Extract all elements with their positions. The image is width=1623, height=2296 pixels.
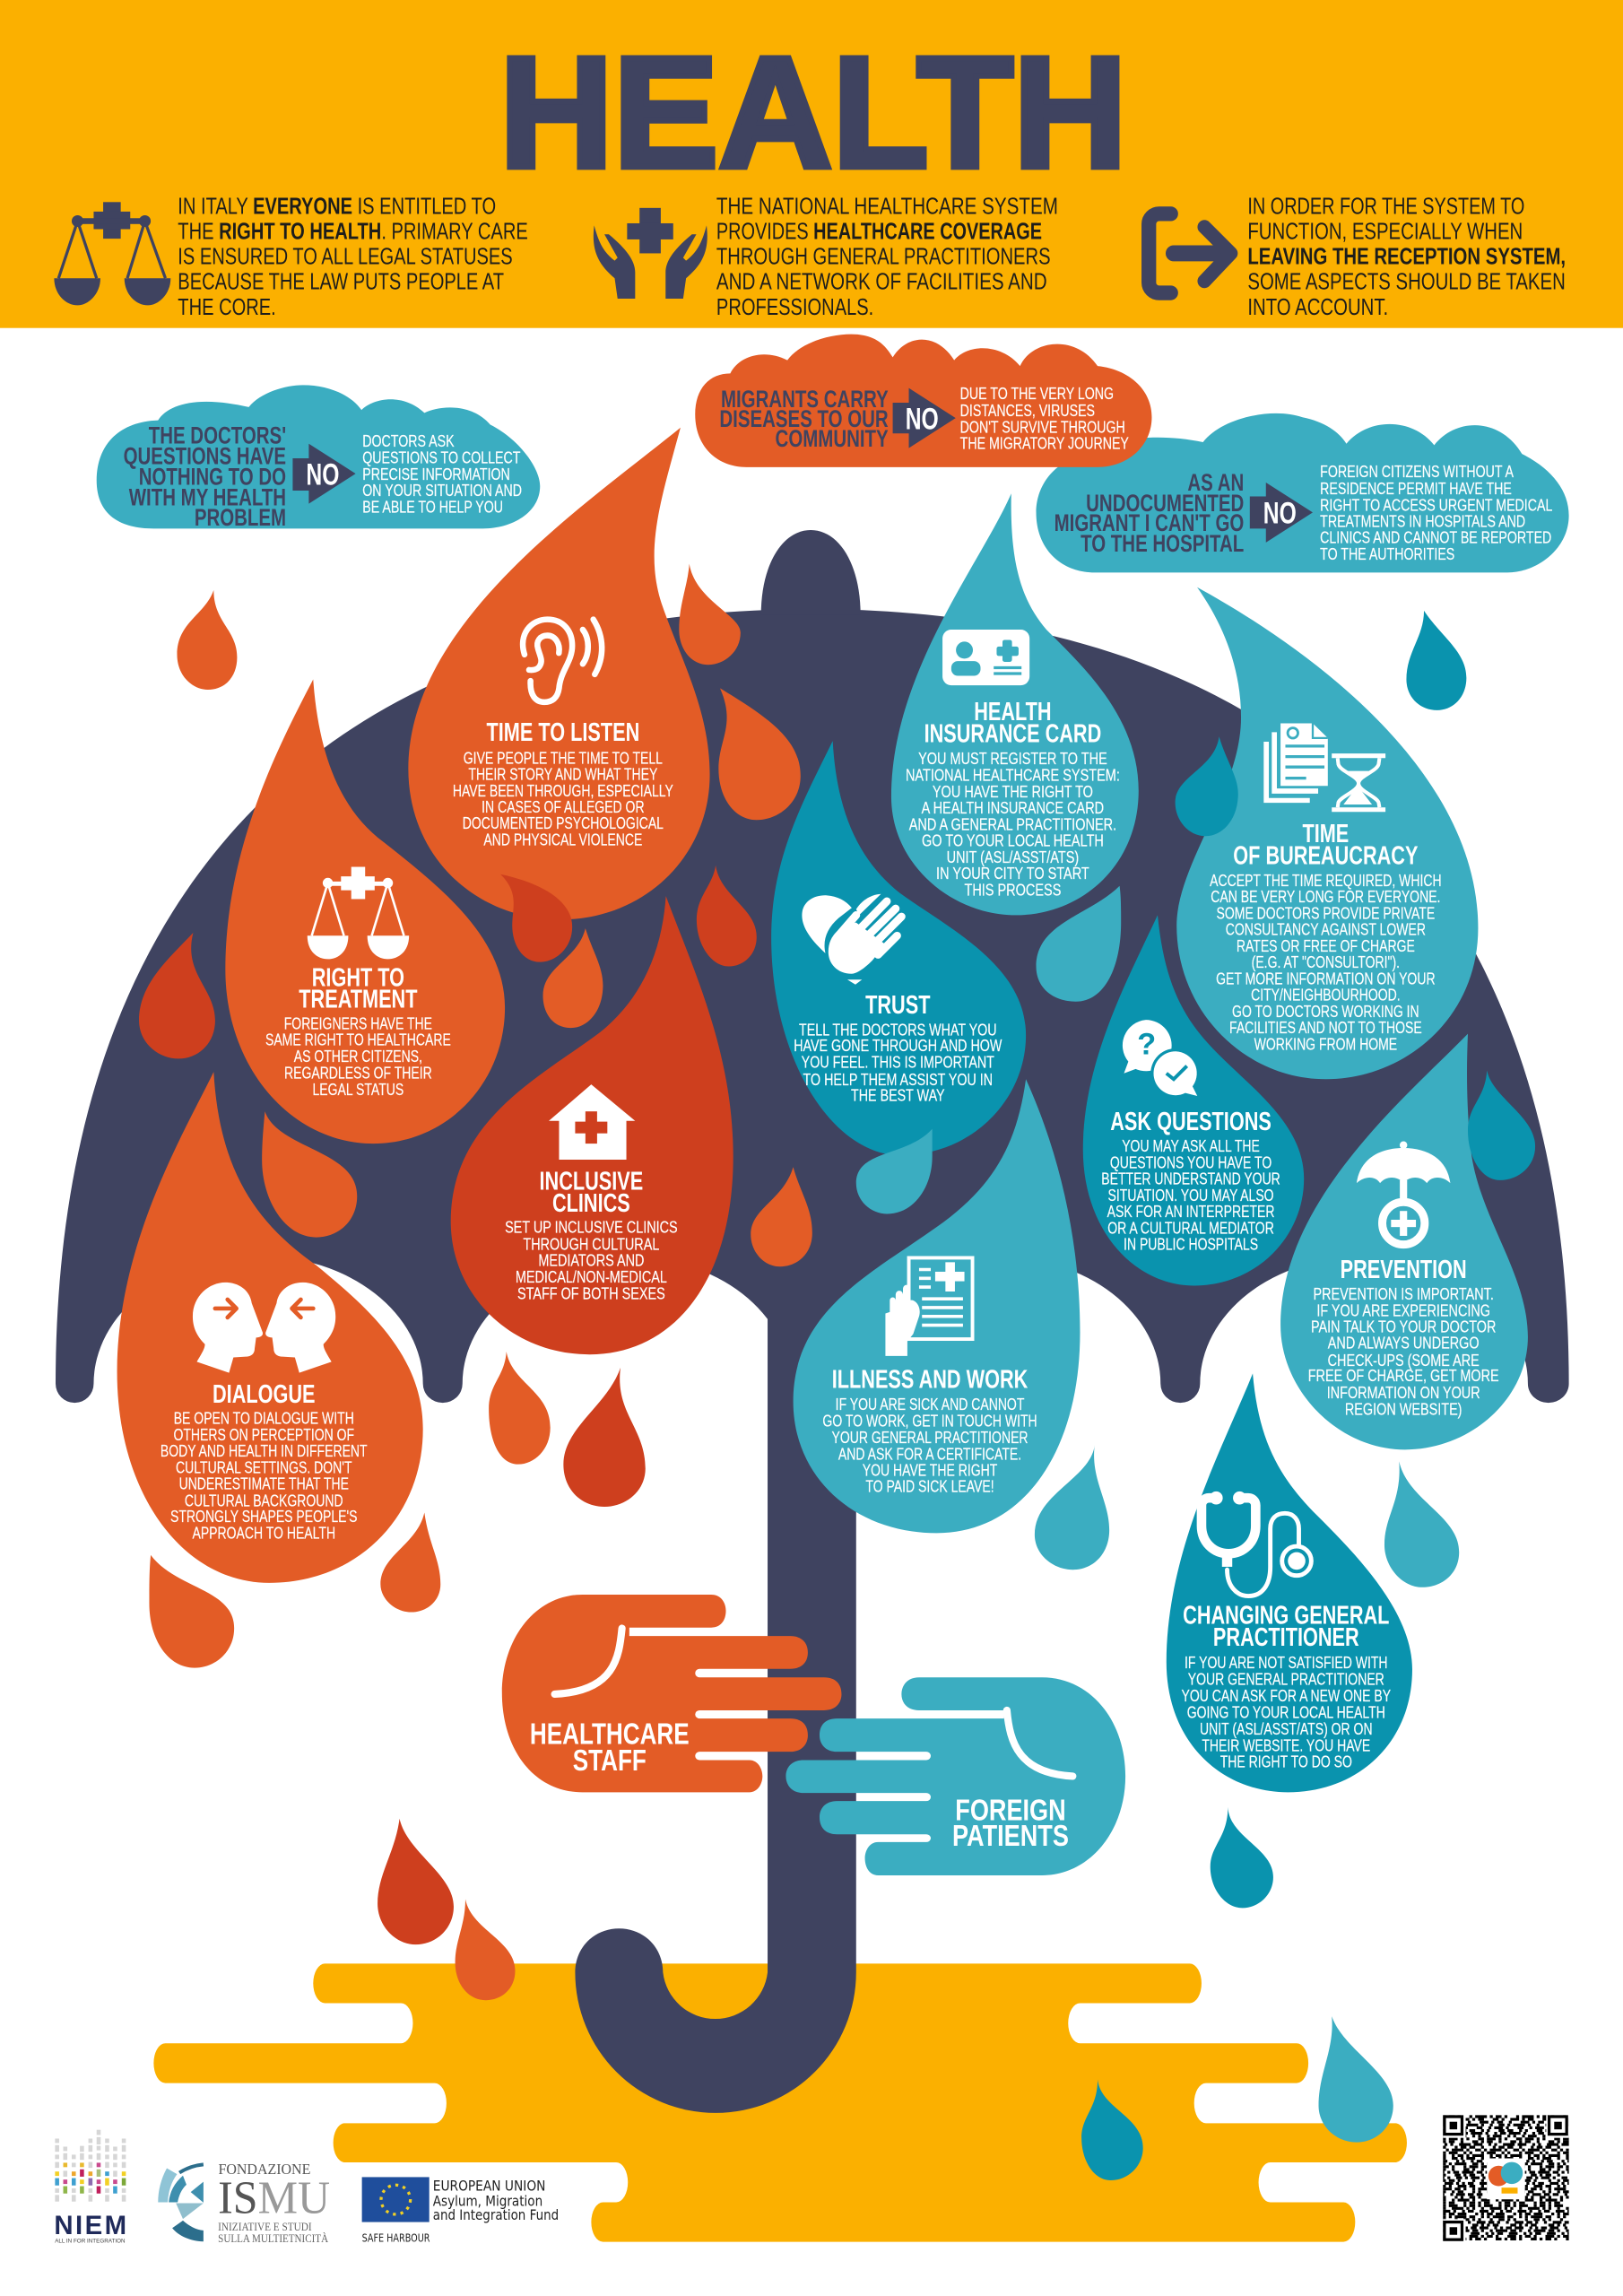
panel: health insurance card bbox=[891, 493, 1139, 915]
heading and text: APPROACH TO HEALTH bbox=[192, 1525, 335, 1543]
text: right to health: THE RIGHT TO HEALTH. PRIMARY CARE bbox=[178, 218, 528, 244]
heading and text: TRUST bbox=[865, 991, 931, 1020]
answer text: RESIDENCE PERMIT HAVE THE bbox=[1320, 480, 1512, 498]
heading and text: INFORMATION ON YOUR bbox=[1327, 1383, 1480, 1403]
answer text bbox=[362, 432, 522, 517]
icon: stethoscope bbox=[1202, 1492, 1311, 1596]
heading and text: CULTURAL SETTINGS. DON'T bbox=[176, 1459, 352, 1477]
small falling drops: orange and red bbox=[139, 564, 812, 2000]
heading and text: CAN BE VERY LONG FOR EVERYONE. bbox=[1211, 888, 1440, 907]
heading and text: OF BUREAUCRACY bbox=[1233, 841, 1418, 870]
heading and text: PAIN TALK TO YOUR DOCTOR bbox=[1311, 1318, 1496, 1336]
label: foreign patients: PATIENTS bbox=[952, 1819, 1069, 1853]
heading and text: LEGAL STATUS bbox=[313, 1081, 404, 1100]
cloud: diseases myth bbox=[695, 335, 1151, 467]
myth statement: MIGRANT I CAN'T GO bbox=[1055, 509, 1244, 537]
panel: time of bureaucracy bbox=[1176, 587, 1478, 1079]
myth statement bbox=[719, 386, 889, 453]
heading and text: AND ALWAYS UNDERGO bbox=[1328, 1334, 1480, 1352]
heading and text: TELL THE DOCTORS WHAT YOU bbox=[799, 1022, 997, 1039]
heading and text: BETTER UNDERSTAND YOUR bbox=[1101, 1170, 1280, 1188]
myth statement: COMMUNITY bbox=[776, 425, 889, 453]
myth statement: QUESTIONS HAVE bbox=[124, 443, 286, 470]
QR centre artwork bbox=[1487, 2159, 1525, 2199]
heading and text: UNIT (ASL/ASST/ATS) OR ON bbox=[1200, 1720, 1373, 1739]
QR finder patterns bbox=[1443, 2115, 1569, 2242]
icon: speech bubbles bbox=[1123, 1020, 1200, 1098]
heading and text: AND ASK FOR A CERTIFICATE. bbox=[838, 1446, 1021, 1464]
heading and text: QUESTIONS YOU HAVE TO bbox=[1110, 1154, 1271, 1172]
icon: umbrella and medical ring bbox=[1357, 1141, 1450, 1245]
icon: scales bbox=[308, 867, 409, 959]
heading and text: REGARDLESS OF THEIR bbox=[284, 1065, 432, 1083]
heading and text: ASK FOR AN INTERPRETER bbox=[1107, 1203, 1275, 1222]
heading and text bbox=[794, 991, 1002, 1105]
icon: speech bubbles: ? bbox=[1137, 1028, 1156, 1062]
answer text: RIGHT TO ACCESS URGENT MEDICAL bbox=[1320, 497, 1552, 515]
header band bbox=[0, 0, 1623, 328]
heading and text: THEIR WEBSITE. YOU HAVE bbox=[1202, 1737, 1370, 1755]
icon: ear bbox=[523, 620, 602, 702]
panel: changing general practitioner bbox=[1167, 1373, 1412, 1792]
label: healthcare staff: HEALTHCARE bbox=[530, 1718, 690, 1751]
heading and text: YOUR GENERAL PRACTITIONER bbox=[1188, 1671, 1384, 1689]
heading and text: BE OPEN TO DIALOGUE WITH bbox=[174, 1410, 354, 1428]
heading and text: CITY/NEIGHBOURHOOD. bbox=[1251, 987, 1401, 1004]
icon: medical certificate bbox=[885, 1257, 973, 1356]
small falling drops: teal bbox=[856, 611, 1535, 2180]
icon: hands with cross bbox=[594, 208, 707, 299]
umbrella handle bbox=[575, 1318, 856, 2113]
logo: Fondazione ISMU: FONDAZIONE bbox=[219, 2161, 310, 2178]
heading and text: AND A GENERAL PRACTITIONER. bbox=[909, 815, 1116, 834]
text: right to health: BECAUSE THE LAW PUTS PEOPLE AT bbox=[178, 268, 504, 294]
panel: ask questions bbox=[1083, 915, 1304, 1285]
heading and text: BODY AND HEALTH IN DIFFERENT bbox=[161, 1442, 368, 1461]
arrow: no: NO bbox=[906, 403, 939, 436]
heading and text: CULTURAL BACKGROUND bbox=[185, 1492, 343, 1510]
logo: Fondazione ISMU: SULLA MULTIETNICITÀ bbox=[218, 2232, 328, 2245]
umbrella canopy bbox=[56, 609, 1569, 1403]
panel: inclusive clinics bbox=[451, 896, 733, 1354]
NIEM wordmark: NIEM bbox=[54, 2211, 126, 2240]
answer text: DISTANCES, VIRUSES bbox=[960, 402, 1095, 421]
logo: European Union fund: EUROPEAN UNION bbox=[433, 2177, 545, 2194]
heading and text: IF YOU ARE EXPERIENCING bbox=[1316, 1301, 1490, 1320]
heading and text: GET MORE INFORMATION ON YOUR bbox=[1216, 970, 1436, 988]
label: healthcare staff bbox=[530, 1718, 690, 1778]
heading and text: THIS PROCESS bbox=[964, 881, 1061, 900]
heading and text: CHECK-UPS (SOME ARE bbox=[1328, 1351, 1480, 1370]
text: reception system: SOME ASPECTS SHOULD BE TAKEN bbox=[1247, 268, 1566, 294]
heading and text: IN PUBLIC HOSPITALS bbox=[1124, 1236, 1258, 1254]
heading and text: RATES OR FREE OF CHARGE bbox=[1237, 937, 1415, 955]
heading and text: GO TO YOUR LOCAL HEALTH bbox=[922, 831, 1104, 850]
answer text: THE MIGRATORY JOURNEY bbox=[960, 435, 1129, 453]
heading and text bbox=[505, 1168, 678, 1303]
emblem bbox=[158, 2164, 204, 2241]
heading and text: INCLUSIVE bbox=[539, 1168, 643, 1196]
heading and text: OTHERS ON PERCEPTION OF bbox=[173, 1426, 354, 1444]
text: healthcare coverage: THE NATIONAL HEALTHCARE SYSTEM bbox=[716, 193, 1058, 219]
heading and text: NATIONAL HEALTHCARE SYSTEM: bbox=[906, 766, 1120, 785]
text: reception system: IN ORDER FOR THE SYSTEM TO bbox=[1247, 193, 1524, 219]
text: healthcare coverage: AND A NETWORK OF FACILITIES AND bbox=[716, 268, 1047, 294]
text: reception system: LEAVING THE RECEPTION SYSTEM, bbox=[1247, 243, 1566, 269]
answer text: BE ABLE TO HELP YOU bbox=[362, 499, 503, 517]
myth statement: TO THE HOSPITAL bbox=[1081, 531, 1244, 558]
logo: European Union fund: and Integration Fund bbox=[433, 2206, 559, 2223]
panel: trust bbox=[771, 741, 1026, 1155]
arrow: no bbox=[893, 388, 956, 448]
arrow: no: NO bbox=[1263, 497, 1297, 531]
heading and text bbox=[265, 964, 451, 1100]
heading and text: YOU CAN ASK FOR A NEW ONE BY bbox=[1182, 1687, 1391, 1706]
heading and text: REGION WEBSITE) bbox=[1345, 1400, 1462, 1419]
heading and text: HEALTH bbox=[974, 698, 1052, 726]
heading and text: CONSULTANCY AGAINST LOWER bbox=[1226, 921, 1426, 939]
answer text: TREATMENTS IN HOSPITALS AND bbox=[1320, 513, 1525, 531]
text: healthcare coverage: THROUGH GENERAL PRACTITIONERS bbox=[716, 243, 1051, 269]
heading and text: SAME RIGHT TO HEALTHCARE bbox=[265, 1031, 451, 1049]
heading and text: HAVE GONE THROUGH AND HOW bbox=[794, 1038, 1002, 1056]
heading and text: INSURANCE CARD bbox=[924, 720, 1101, 749]
heading and text: HAVE BEEN THROUGH, ESPECIALLY bbox=[453, 782, 673, 800]
grey people dots bbox=[55, 2130, 126, 2202]
heading and text: A HEALTH INSURANCE CARD bbox=[922, 798, 1104, 818]
myth statement: UNDOCUMENTED bbox=[1086, 490, 1244, 517]
heading and text: SOME DOCTORS PROVIDE PRIVATE bbox=[1217, 905, 1435, 923]
heading and text: CLINICS bbox=[552, 1189, 630, 1218]
heading and text bbox=[1308, 1256, 1499, 1419]
heading and text: TO PAID SICK LEAVE! bbox=[865, 1478, 994, 1496]
icon: heart and hand bbox=[802, 894, 901, 985]
panel: right to treatment bbox=[225, 680, 505, 1144]
heading and text: IN CASES OF ALLEGED OR bbox=[482, 798, 645, 817]
heading and text: MEDIATORS AND bbox=[538, 1251, 644, 1270]
heading and text: YOU HAVE THE RIGHT TO bbox=[933, 782, 1093, 801]
heading and text: AND PHYSICAL VIOLENCE bbox=[483, 831, 642, 849]
text: right to health: IN ITALY EVERYONE IS ENTITLED TO bbox=[178, 193, 496, 219]
heading and text: ACCEPT THE TIME REQUIRED, WHICH bbox=[1210, 872, 1442, 890]
text: healthcare coverage: PROFESSIONALS. bbox=[716, 294, 873, 319]
heading and text bbox=[1101, 1108, 1280, 1254]
heading and text bbox=[906, 698, 1120, 900]
text: reception system bbox=[1247, 193, 1566, 319]
heading and text: ILLNESS AND WORK bbox=[832, 1366, 1028, 1395]
heading and text: UNDERESTIMATE THAT THE bbox=[179, 1475, 349, 1493]
heading and text: THE RIGHT TO DO SO bbox=[1220, 1753, 1352, 1771]
arrow: no bbox=[1250, 483, 1313, 543]
text: right to health: IS ENSURED TO ALL LEGAL STATUSES bbox=[178, 243, 513, 269]
text: reception system: FUNCTION, ESPECIALLY WHEN bbox=[1247, 218, 1523, 244]
heading and text bbox=[453, 718, 673, 849]
heading and text: PRACTITIONER bbox=[1213, 1623, 1359, 1652]
coloured people dots bbox=[55, 2162, 126, 2194]
answer text bbox=[1320, 464, 1552, 564]
heading and text: PREVENTION bbox=[1341, 1256, 1467, 1284]
heading and text bbox=[822, 1366, 1037, 1496]
text: healthcare coverage bbox=[716, 193, 1058, 319]
logo: NIEM bbox=[54, 2130, 126, 2244]
umbrella bbox=[56, 530, 1569, 2113]
heading and text: GOING TO YOUR LOCAL HEALTH bbox=[1187, 1704, 1385, 1722]
answer text: FOREIGN CITIZENS WITHOUT A bbox=[1320, 464, 1514, 482]
heading and text: PREVENTION IS IMPORTANT. bbox=[1313, 1284, 1494, 1303]
icon: scales bbox=[54, 202, 170, 305]
myth statement: WITH MY HEALTH bbox=[129, 484, 286, 511]
heading and text: YOUR GENERAL PRACTITIONER bbox=[832, 1429, 1028, 1447]
logo: European Union fund bbox=[362, 2177, 559, 2245]
myth statement: NOTHING TO DO bbox=[139, 464, 286, 491]
panel: prevention bbox=[1280, 1034, 1528, 1449]
heading and text bbox=[161, 1380, 368, 1543]
heading and text: DIALOGUE bbox=[213, 1380, 316, 1409]
heading and text: IF YOU ARE SICK AND CANNOT bbox=[836, 1396, 1024, 1414]
heading and text: STRONGLY SHAPES PEOPLE'S bbox=[170, 1508, 358, 1526]
arrow: no: NO bbox=[306, 458, 339, 491]
myth statement: DISEASES TO OUR bbox=[719, 406, 889, 433]
text: reception system: INTO ACCOUNT. bbox=[1247, 293, 1388, 319]
logo: NIEM: ALL IN FOR INTEGRATION bbox=[55, 2238, 126, 2244]
answer text: ON YOUR SITUATION AND bbox=[362, 482, 522, 500]
heading and text: TIME bbox=[1302, 820, 1349, 848]
heading and text: FOREIGNERS HAVE THE bbox=[284, 1015, 432, 1033]
heading and text: OR A CULTURAL MEDIATOR bbox=[1107, 1220, 1274, 1238]
myth statement: THE DOCTORS' bbox=[149, 422, 286, 449]
answer text: TO THE AUTHORITIES bbox=[1320, 545, 1454, 564]
answer text: CLINICS AND CANNOT BE REPORTED bbox=[1320, 529, 1551, 547]
logo: Fondazione ISMU: INIZIATIVE E STUDI bbox=[218, 2221, 312, 2233]
heading and text: AS OTHER CITIZENS, bbox=[294, 1048, 422, 1066]
icon: two heads bbox=[193, 1283, 335, 1373]
heading and text: TIME TO LISTEN bbox=[486, 718, 639, 747]
hand: healthcare staff bbox=[502, 1595, 841, 1792]
heading and text: SET UP INCLUSIVE CLINICS bbox=[505, 1218, 678, 1237]
heading and text: TREATMENT bbox=[299, 985, 418, 1013]
heading and text: STAFF OF BOTH SEXES bbox=[517, 1284, 665, 1303]
myth statement bbox=[124, 422, 286, 532]
text: right to health bbox=[178, 193, 528, 319]
answer text: QUESTIONS TO COLLECT bbox=[362, 449, 520, 467]
heading and text: YOU MUST REGISTER TO THE bbox=[918, 750, 1107, 769]
heading and text: THROUGH CULTURAL bbox=[523, 1235, 659, 1254]
answer text: DON'T SURVIVE THROUGH bbox=[960, 419, 1125, 437]
myth statement: AS AN bbox=[1187, 469, 1244, 497]
heading and text: ASK QUESTIONS bbox=[1110, 1108, 1271, 1136]
panel: time to listen bbox=[408, 428, 710, 919]
label: healthcare staff: STAFF bbox=[573, 1744, 647, 1778]
heading and text: FACILITIES AND NOT TO THOSE bbox=[1229, 1019, 1422, 1038]
heading and text bbox=[1182, 1602, 1391, 1771]
heading and text: MEDICAL/NON-MEDICAL bbox=[516, 1267, 667, 1287]
label: foreign patients: FOREIGN bbox=[955, 1794, 1066, 1827]
heading and text: THEIR STORY AND WHAT THEY bbox=[468, 766, 657, 784]
yellow puddle bbox=[153, 1963, 1407, 2242]
heading and text: IN YOUR CITY TO START bbox=[936, 864, 1089, 883]
answer text: DOCTORS ASK bbox=[362, 432, 455, 450]
arrow: no bbox=[292, 444, 356, 504]
myth statement bbox=[1055, 469, 1244, 558]
heading and text: GIVE PEOPLE THE TIME TO TELL bbox=[464, 750, 663, 768]
heading and text: UNIT (ASL/ASST/ATS) bbox=[947, 848, 1079, 866]
logo: Fondazione ISMU bbox=[158, 2161, 330, 2245]
title: HEALTH bbox=[499, 24, 1127, 201]
myth statement: MIGRANTS CARRY bbox=[721, 386, 889, 413]
answer text: DUE TO THE VERY LONG bbox=[960, 386, 1114, 404]
heading and text: DOCUMENTED PSYCHOLOGICAL bbox=[463, 814, 664, 833]
text: right to health: THE CORE. bbox=[178, 293, 276, 319]
heading and text: RIGHT TO bbox=[312, 964, 404, 992]
hand: foreign patients bbox=[785, 1677, 1125, 1875]
myth statement: PROBLEM bbox=[195, 504, 286, 532]
heading and text: CHANGING GENERAL bbox=[1183, 1602, 1389, 1630]
cloud: undocumented migrant myth bbox=[1037, 413, 1569, 572]
text: healthcare coverage: PROVIDES HEALTHCARE COVERAGE bbox=[716, 218, 1042, 244]
label: foreign patients bbox=[952, 1794, 1069, 1853]
heading and text bbox=[1210, 820, 1442, 1054]
icon: exit arrow bbox=[1149, 213, 1231, 293]
panel: illness and work bbox=[794, 1079, 1080, 1533]
heading and text: FREE OF CHARGE, GET MORE bbox=[1308, 1367, 1499, 1386]
logo: European Union fund: SAFE HARBOUR bbox=[362, 2232, 430, 2245]
logo: Fondazione ISMU: ISMU bbox=[218, 2172, 330, 2224]
icon: card bbox=[942, 630, 1029, 685]
heading and text: YOU FEEL. THIS IS IMPORTANT bbox=[802, 1054, 994, 1072]
umbrella top cap bbox=[761, 530, 861, 615]
answer text: PRECISE INFORMATION bbox=[362, 465, 510, 483]
panel: dialogue bbox=[117, 1072, 423, 1583]
QR code bbox=[1443, 2115, 1569, 2242]
heading and text: IF YOU ARE NOT SATISFIED WITH bbox=[1185, 1654, 1388, 1672]
cloud: doctors' questions myth bbox=[97, 385, 540, 532]
icon: clinic house bbox=[549, 1084, 635, 1160]
answer text bbox=[960, 386, 1129, 453]
heading and text: GO TO DOCTORS WORKING IN bbox=[1232, 1003, 1419, 1021]
heading and text: TO HELP THEM ASSIST YOU IN bbox=[803, 1071, 993, 1089]
heading and text: WORKING FROM HOME bbox=[1254, 1036, 1397, 1054]
heading and text: YOU HAVE THE RIGHT bbox=[863, 1462, 997, 1480]
heading and text: THE BEST WAY bbox=[851, 1087, 945, 1105]
heading and text: YOU MAY ASK ALL THE bbox=[1122, 1137, 1260, 1156]
heading and text: SITUATION. YOU MAY ALSO bbox=[1108, 1187, 1274, 1205]
heading and text: (E.G. AT "CONSULTORI"). bbox=[1252, 953, 1400, 972]
icon: papers and hourglass bbox=[1263, 724, 1385, 812]
logo: European Union fund: Asylum, Migration bbox=[433, 2192, 542, 2209]
heading and text: GO TO WORK, GET IN TOUCH WITH bbox=[822, 1413, 1037, 1431]
